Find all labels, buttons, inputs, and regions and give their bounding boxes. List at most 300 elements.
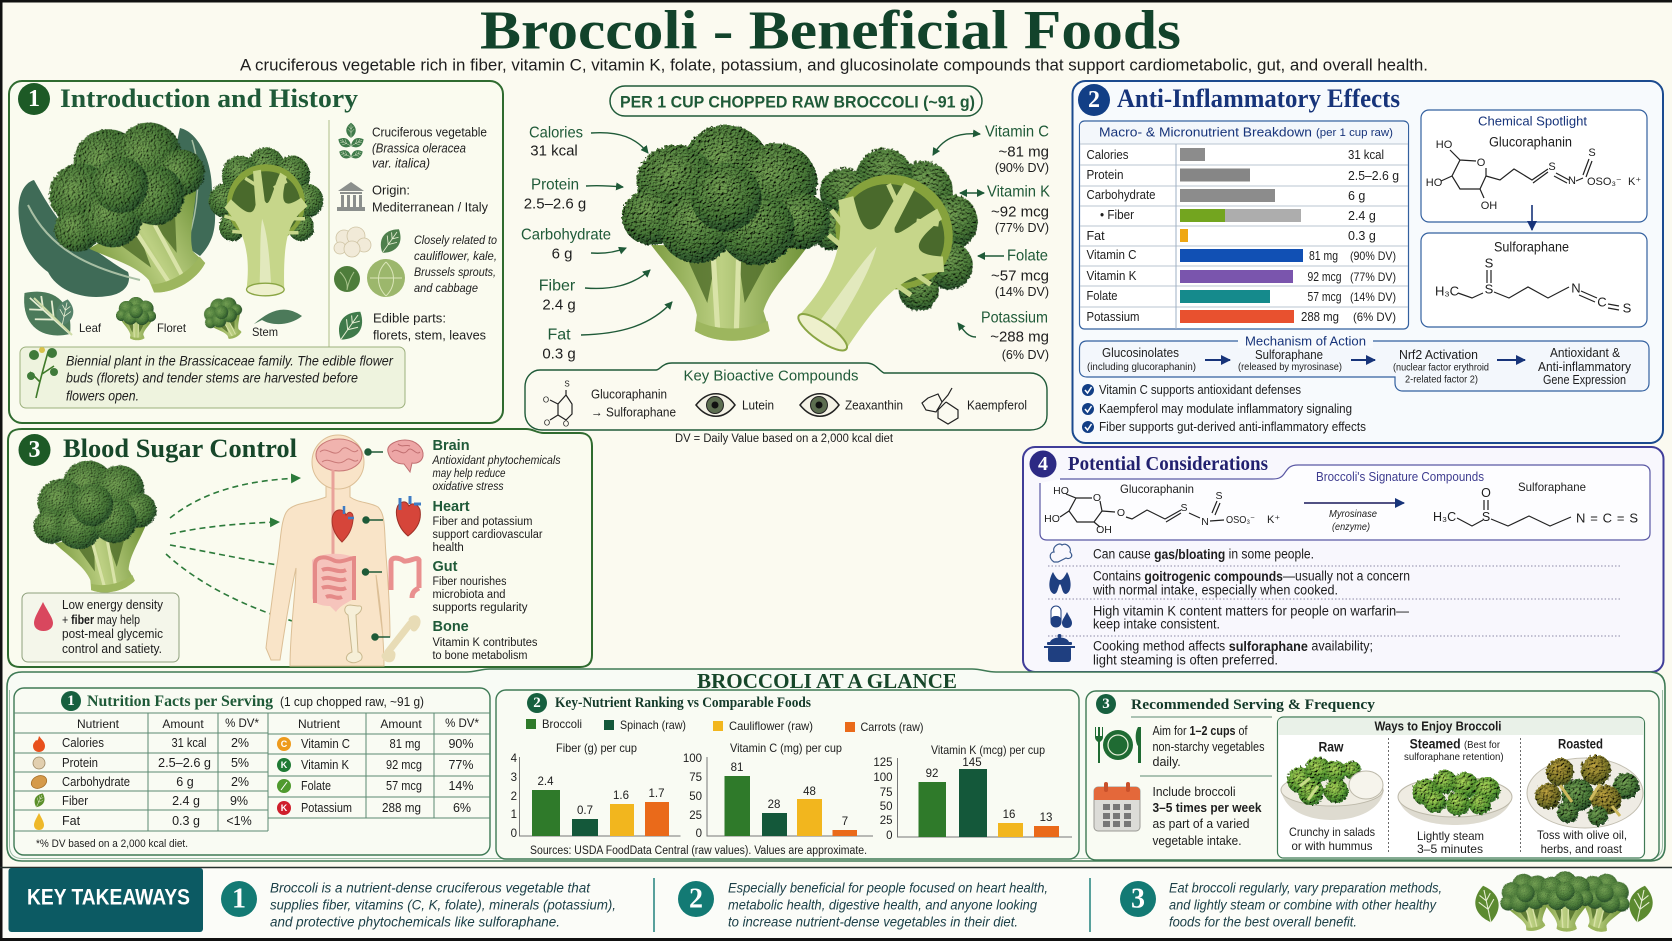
organ detail: brain: Brain [432,438,470,454]
arrow [1351,359,1375,361]
organ: intestines [312,554,355,612]
number badge [61,691,81,711]
nutrition facts table: Nutrition Facts per Serving [87,693,273,710]
row values: 2.5–2.6 g [1348,169,1399,183]
arrow: myrosinase: (enzyme) [1332,521,1370,533]
row values: 92 mcg [1308,270,1342,284]
callout: glycemic control: control and satiety. [62,642,162,656]
note: biennial plant [20,347,405,408]
legend: Cauliflower (raw) [729,719,813,733]
row values: 2.4 g [1348,209,1376,223]
micronutrient rows: Vitamin C [301,737,350,751]
takeaway 1: Broccoli is a nutrient-dense cruciferous vegetable that [270,880,591,896]
broccoli [22,448,171,605]
icon: leaf [332,306,369,346]
subtitle: A cruciferous vegetable rich in fiber, vitamin C, vitamin K, folate, potassium, and glucosinolate compounds that support cardiometabolic, gut, and overall health. [240,56,1428,74]
consideration: gas [1050,544,1314,562]
icon: vitamin C [277,737,291,751]
row values [1301,148,1399,324]
row labels: Carbohydrate [1086,188,1156,202]
signature compounds box: Glucoraphanin [1120,482,1194,496]
row values: (14% DV) [1350,290,1396,304]
divider [328,120,330,347]
structure: glucoraphanin: S [1215,490,1223,502]
consideration: goitrogens: with normal intake, especially when cooked. [1092,582,1338,598]
macro rows: 9% [230,794,248,808]
plant part: leaf: Leaf [79,321,102,335]
organ detail: brain: Antioxidant phytochemicals [432,455,561,467]
option: raw: Crunchy in salads [1289,825,1375,839]
nutrient labels left: 6 g [552,246,572,262]
consideration: goitrogens [1049,568,1410,598]
central halved broccoli [746,116,1012,391]
option: steamed [1398,736,1512,856]
micronutrient rows: Vitamin K [301,758,350,772]
structure: sulforaphane [1435,256,1632,316]
key takeaways label: KEY TAKEAWAYS [27,884,190,910]
plant part: stem: Stem [252,325,278,339]
key bioactive compounds [525,363,1047,430]
legend: Broccoli [542,717,582,731]
plant part: floret: Floret [157,321,187,335]
organ detail: heart: Fiber and potassium [432,516,532,528]
chart: vitamin K: Vitamin K (mcg) per cup [931,743,1045,757]
structure: glucoraphanin: O [1117,507,1125,519]
macro rows: Carbohydrate [62,775,130,789]
takeaway 1: supplies fiber, vitamins (C, K, folate), minerals (potassium), [270,898,616,912]
nutrient labels left: Calories [529,124,583,142]
chart: vitamin C: 75 [689,772,702,784]
structure: glucoraphanin [1426,139,1641,212]
icon: heart [396,496,421,536]
chart: vitamin C [683,741,873,840]
nutrient labels right: (90% DV) [995,161,1049,175]
structure: glucoraphanin: O [1477,157,1486,169]
nutrient labels left: Fiber [539,278,576,294]
checklist: Kaempferol may modulate inflammatory signaling [1099,402,1352,416]
consideration: cooking method [1044,634,1373,668]
structure: glucoraphanin: K⁺ [1267,514,1280,526]
key nutrient ranking charts [496,690,1079,859]
structure: sulforaphane: S [1482,510,1490,524]
takeaway 1: 1 [232,884,246,914]
nutrient labels right: Vitamin K [987,184,1050,200]
panel: broccoli at a glance [7,669,1665,861]
structure: glucoraphanin: N [1568,175,1576,187]
option: roasted [1527,736,1643,856]
table headers: Amount [162,717,204,731]
arrow [1205,359,1230,361]
organ detail: brain [388,438,561,493]
nutrient arrows [581,133,1004,337]
structure: glucoraphanin: OSO₃⁻ [1587,176,1622,188]
panel: per cup nutrient diagram [521,86,1050,445]
icon: vitamin K: K [281,760,288,770]
fact: cruciferous vegetable [336,123,487,170]
step: nrf2 activation: 2-related factor 2) [1405,374,1478,386]
key bioactive compounds: Zeaxanthin [845,398,903,412]
row values: 0.3 g [1348,229,1376,243]
chart: vitamin K: 125 [873,757,892,769]
structure: glucoraphanin: HO [1053,485,1069,497]
icon: protein [33,757,45,769]
structure: sulforaphane: H₃C [1435,284,1459,298]
chart: fiber: Fiber (g) per cup [556,741,637,755]
nutrient labels right [981,124,1050,362]
heading: potential considerations: Potential Considerations [1068,453,1268,475]
row labels: • Fiber [1100,208,1134,222]
chart: vitamin C: 25 [689,810,702,822]
fact: relatives: and cabbage [414,281,478,295]
macro rows: 2.5–2.6 g [158,756,211,770]
icon: bone [385,619,417,659]
row values: 31 kcal [1348,148,1384,162]
option: raw: Raw [1318,740,1344,754]
organ detail: heart: Heart [432,499,470,515]
fact: origin: Mediterranean / Italy [372,200,488,214]
icon: cloud [1050,544,1072,562]
organ detail: bone: Vitamin K contributes [432,637,538,649]
structure: sulforaphane: C [1597,294,1607,310]
callout: glycemic control: post-meal glycemic [62,627,163,641]
chart: fiber: 0 [511,828,517,840]
option: roasted: Roasted [1558,736,1603,752]
structure: glucoraphanin: N [1201,516,1209,528]
takeaway 3: 3 [1131,884,1145,914]
icon: eye [696,394,735,416]
arrow: myrosinase [1304,503,1404,533]
row values: (6% DV) [1353,310,1396,324]
key bioactive compounds: Key Bioactive Compounds [684,368,858,384]
chart: fiber: 0.7 [577,805,593,817]
ways to enjoy broccoli [1278,717,1644,858]
table headers: Nutrient [298,717,341,731]
legend [526,717,924,734]
macro rows: 2.4 g [172,794,200,808]
structure: glucoraphanin: HO [1044,513,1060,525]
row values: 57 mcg [1308,290,1342,304]
heading: introduction and history: Introduction and History [60,84,358,113]
step: glucosinolates: Glucosinolates [1102,346,1179,360]
organ detail: brain: oxidative stress [432,481,504,493]
step: sulforaphane: Sulforaphane [1255,348,1323,362]
icon: fat drop [34,813,44,830]
structure: glucoraphanin: OSO₃⁻ [1226,514,1255,526]
option: steamed: (Best for [1464,739,1500,751]
organ: bone [345,605,362,663]
organ detail: gut: Fiber nourishes [432,576,507,588]
fact: origin [337,182,488,214]
nutrient labels left: Protein [531,176,579,194]
halved broccoli [209,147,323,296]
icon: vitamin C: C [281,739,288,749]
icon: potassium: K [281,803,288,813]
number badge 4: 4 [1038,453,1048,475]
chart: vitamin C: 0 [696,828,702,840]
note: biennial plant: buds (florets) and tender stems are harvested before [66,370,358,386]
signature compounds box [1040,465,1650,540]
nutrient labels left: 2.4 g [542,296,576,314]
structure: glucoraphanin: O [1093,492,1101,504]
icon: blood drop [34,602,53,631]
chart: fiber: 2.4 [538,776,554,788]
option: raw: or with hummus [1292,839,1372,853]
checklist [1082,383,1366,434]
icon: cabbage [367,259,405,297]
option: roasted: herbs, and roast [1541,842,1623,856]
table headers [77,717,479,731]
micronutrient rows: 92 mcg [386,758,422,772]
icon: kale [375,224,406,258]
nutrient labels right: Vitamin C [985,124,1049,140]
step: gene expression: Antioxidant & [1550,346,1621,360]
dashed arrows to body [166,478,339,632]
row labels: Protein [1086,168,1124,182]
key bioactive compounds: Lutein [742,398,774,412]
consideration: warfarin: keep intake consistent. [1093,616,1220,632]
legend: Carrots (raw) [860,720,924,734]
table headers: Nutrient [77,717,120,731]
takeaway 2: 2 [689,884,703,914]
serving pill: PER 1 CUP CHOPPED RAW BROCCOLI (~91 g) [620,92,975,112]
nutrient labels right: ~288 mg [990,328,1049,346]
bars [1180,148,1303,323]
serving pill [610,86,982,116]
fact: cruciferous vegetable: (Brassica oleracea [372,140,466,156]
note: biennial plant: Biennial plant in the Brassicaceae family. The edible flower [66,354,393,368]
organ detail: heart: support cardiovascular [432,529,543,541]
takeaway 3: Eat broccoli regularly, vary preparation methods, [1169,880,1442,896]
callout: glycemic control: Low energy density [62,598,164,612]
macro rows: 31 kcal [172,736,206,750]
human body illustration [266,435,390,666]
consideration: cooking method: light steaming is often preferred. [1093,652,1278,668]
title: Broccoli - Beneficial Foods [480,0,1181,60]
nutrient labels right: (14% DV) [995,285,1049,299]
icon: potassium [277,801,291,815]
nutrient labels left: Fat [547,326,571,344]
macro rows: 5% [231,756,249,770]
micronutrient rows: 6% [453,801,471,815]
row labels: Vitamin C [1086,248,1136,262]
organ detail: heart [396,496,543,554]
icon: kaempferol molecule [922,388,958,424]
recommended serving and frequency: daily. [1152,755,1181,769]
note: biennial plant: flowers open. [66,388,139,404]
row labels: Potassium [1086,310,1140,324]
chart: fiber: 3 [511,772,517,784]
icon: glucoraphanin molecule [543,380,572,428]
macro rows: 6 g [176,775,194,789]
step: gene expression [1538,346,1632,387]
macro rows: Fiber [62,794,88,808]
step: nrf2 activation [1393,348,1489,386]
key nutrient ranking charts: Key-Nutrient Ranking vs Comparable Foods [555,695,811,711]
consideration: gas: Can cause gas/bloating in some people. [1093,546,1314,562]
number badge: 3 [1102,696,1110,712]
number badge: 2 [533,695,541,711]
micronutrient rows [277,737,474,815]
organ: heart [332,506,354,542]
macro rows: Fat [62,814,81,828]
table headers: Amount [380,717,422,731]
micronutrient rows: 14% [448,779,474,793]
table headers: % DV* [445,718,479,730]
option: raw [1281,740,1384,853]
row values: (77% DV) [1350,270,1396,284]
structure: sulforaphane: H₃C [1433,510,1456,524]
recommended serving and frequency: as part of a varied [1152,817,1250,831]
panel: anti-inflammatory effects [1072,81,1663,443]
organ detail: brain: may help reduce [432,468,506,480]
structure: sulforaphane: S [1623,300,1632,316]
structure: glucoraphanin [1044,485,1280,536]
chart: vitamin K: 75 [880,787,892,799]
structure: sulforaphane: N = C = S [1576,510,1638,526]
option: steamed: Lightly steam [1417,829,1484,843]
chart sources: Sources: USDA FoodData Central (raw values). Values are approximate. [530,845,867,857]
organ detail: bone [385,619,538,662]
fact: cruciferous vegetable: Cruciferous vegetable [372,124,487,140]
chart: vitamin K: 0 [886,830,892,842]
nutrition facts table: (1 cup chopped raw, ~91 g) [280,695,424,709]
macro rows: 2% [231,736,249,750]
panel: potential considerations [1023,447,1664,672]
table footnote: *% DV based on a 2,000 kcal diet. [36,838,188,850]
arrow: conversion [1531,205,1533,230]
micronutrient rows: Folate [301,779,331,793]
nutrient labels left: 31 kcal [530,142,578,160]
fact: edible parts [332,306,486,346]
chemical spotlight: sulforaphane: Sulforaphane [1494,240,1569,254]
micronutrient rows: 57 mcg [386,779,422,793]
chart: vitamin K: 100 [873,772,892,784]
nutrient labels right: Potassium [981,310,1048,326]
icon: temple [337,182,365,211]
nutrient labels left: 0.3 g [542,346,576,362]
structure: sulforaphane: S [1485,256,1494,270]
chart: fiber: 4 [511,753,518,765]
large broccoli [20,93,250,328]
key bioactive compounds: Glucoraphanin [591,386,667,402]
chart: vitamin C: Vitamin C (mg) per cup [730,741,842,755]
key bioactive compounds: Kaempferol [967,398,1027,412]
option: steamed: sulforaphane retention) [1404,751,1504,763]
number badge 2 [1078,84,1110,116]
heading: blood sugar control: Blood Sugar Control [63,434,297,463]
structure: glucoraphanin: HO [1426,177,1443,189]
structure: sulforaphane [1433,486,1638,526]
macro rows: Protein [62,756,98,770]
central whole broccoli [622,125,830,341]
option: roasted: Toss with olive oil, [1537,828,1627,842]
chemical spotlight: glucoraphanin [1421,110,1647,222]
number badge [1096,694,1116,714]
option: steamed: Steamed [1410,736,1461,752]
nutrient labels right: Folate [1007,248,1048,264]
organ detail: bone: Bone [432,619,469,635]
signature compounds box: Sulforaphane [1518,480,1586,494]
micronutrient rows: 77% [448,758,474,772]
step: nrf2 activation: (nuclear factor erythroid [1393,362,1489,374]
fact: relatives: Closely related to [414,233,497,247]
number badge 1 [18,83,50,115]
micronutrient rows: 81 mg [390,737,421,751]
structure: glucoraphanin: S [1548,161,1556,173]
nutrient labels right: (6% DV) [1002,348,1049,362]
step: sulforaphane: (released by myrosinase) [1238,361,1342,373]
chart: vitamin K [873,743,1072,842]
chemical spotlight: glucoraphanin: Glucoraphanin [1489,134,1572,150]
chart: fiber: 1.6 [613,790,629,802]
arrow [1497,359,1525,361]
macro rows: <1% [226,814,252,828]
organ: esophagus [332,470,334,560]
structure: glucoraphanin: K⁺ [1628,176,1641,188]
nutrient labels right: (77% DV) [995,221,1049,235]
macro rows [29,736,252,830]
step: glucosinolates [1087,346,1196,373]
ways to enjoy broccoli: Ways to Enjoy Broccoli [1374,718,1502,734]
step: nrf2 activation: Nrf2 Activation [1399,348,1478,362]
takeaway 2: Especially beneficial for people focused on heart health, [728,880,1048,896]
nutrient breakdown table [1080,121,1408,329]
bowl: steamed broccoli [1398,770,1512,825]
fact: relatives: cauliflower, kale, [414,249,497,263]
nutrient labels left: 2.5–2.6 g [524,196,586,212]
number badge 1: 1 [28,86,40,112]
number badge 3: 3 [28,437,40,463]
key bioactive compounds: → Sulforaphane [591,404,676,420]
row values: 81 mg [1309,249,1338,263]
number badge 2: 2 [1088,87,1100,113]
heading: anti-inflammatory effects: Anti-Inflammatory Effects [1117,84,1400,113]
row labels: Folate [1086,289,1118,303]
row values: 6 g [1348,189,1365,203]
plant part: floret [116,297,187,340]
leaves behind broccoli [19,128,215,297]
organ pointers [362,449,390,640]
structure: glucoraphanin: OH [1481,200,1497,212]
bowl: raw broccoli with dip [1281,757,1384,820]
chart: fiber: 1.7 [648,788,664,800]
recommended serving and frequency: 3–5 times per week [1152,801,1262,815]
fact: edible parts: Edible parts: [373,310,446,326]
fact: edible parts: florets, stem, leaves [373,328,486,342]
organ detail: gut [391,558,528,614]
structure: sulforaphane: N [1571,280,1581,296]
recommended serving and frequency [1086,691,1659,860]
nutrient breakdown table: (per 1 cup raw) [1316,127,1393,139]
fact: origin: Origin: [372,182,410,198]
fact: relatives: Brussels sprouts, [414,265,496,279]
option: steamed: 3–5 minutes [1417,842,1483,856]
icon: flame [33,736,45,752]
icon: brussels sprout [334,266,360,292]
nutrient labels right: ~92 mcg [991,204,1049,220]
macro rows: 0.3 g [172,814,200,828]
micronutrient rows: 288 mg [382,801,421,815]
step: glucosinolates: (including glucoraphanin) [1087,361,1196,373]
organ detail: gut: microbiota and [432,589,506,601]
takeaway 1 [221,880,616,930]
heading: broccoli at a glance: BROCCOLI AT A GLANCE [697,669,957,693]
takeaway 3 [1120,880,1442,930]
fact: cruciferous vegetable: var. italica) [372,156,430,170]
icon: eye [800,394,839,416]
takeaway 2: to increase nutrient-dense vegetables in their diet. [728,914,1018,930]
nutrient labels right: ~57 mcg [991,268,1049,284]
